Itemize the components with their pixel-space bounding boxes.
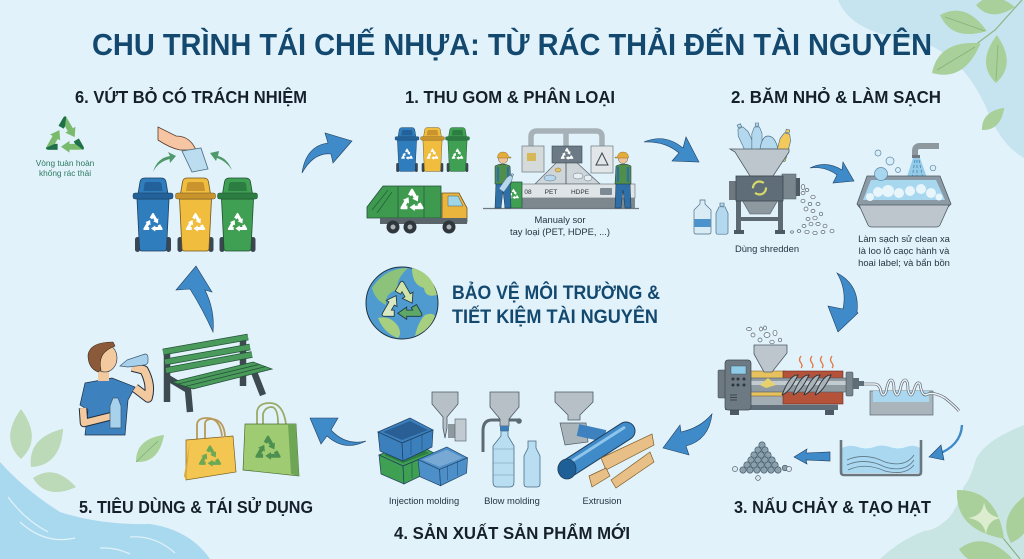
icon: bottle held	[499, 172, 515, 192]
icon: cooling bath	[864, 380, 959, 415]
icon: water tank	[841, 440, 921, 475]
icon: faucet and spray	[904, 146, 939, 186]
label: conveyor materials: 08	[524, 189, 532, 196]
arrow: step 5 to step 6	[176, 266, 213, 332]
text: blow caption: Blow molding	[484, 495, 540, 506]
icon: extruder machine	[718, 345, 864, 415]
icon: green bin	[218, 178, 258, 252]
text: loop caption: khống rác thải	[39, 168, 91, 178]
icon: bottles on floor	[694, 200, 728, 234]
text: washing caption: hoai label; và bẩn bồn	[858, 257, 950, 268]
text: loop caption	[36, 158, 95, 178]
illustration: washing tub	[857, 146, 951, 268]
decoration: left leaves	[10, 409, 78, 496]
icon: injection molding crates	[378, 392, 468, 486]
text: loop caption: Vòng tuàn hoàn	[36, 158, 95, 168]
text: washing caption: Làm sạch sử clean xa	[858, 233, 951, 244]
text: sorting caption: Manualy sor	[534, 214, 586, 225]
badge: closed loop	[36, 116, 95, 178]
icon: extrusion pipe and wood	[555, 392, 654, 488]
icon: recycled bench	[163, 336, 272, 412]
heading: step 4: 4. SẢN XUẤT SẢN PHẨM MỚI	[394, 522, 630, 543]
decoration: top right leaves	[926, 0, 1022, 135]
label: conveyor materials: PET	[545, 189, 557, 196]
text: sorting caption: tay loại (PET, HDPE, ...)	[510, 226, 610, 237]
arrow: green left	[153, 152, 176, 172]
decoration: bottom left water wave	[0, 462, 210, 559]
arrow: step 3 to step 4	[663, 414, 712, 455]
icon: plastic flakes falling	[746, 326, 782, 344]
text: shredder caption: Dùng shredden	[735, 243, 799, 254]
arrow: strand to water tank	[936, 425, 962, 455]
icon: heat waves	[800, 356, 833, 368]
text: message: TIẾT KIỆM TÀI NGUYÊN	[452, 304, 658, 328]
heading: step 5: 5. TIÊU DÙNG & TÁI SỬ DỤNG	[79, 496, 313, 517]
arrow: step 4 to step 5	[310, 418, 366, 445]
text: injection caption: Injection molding	[389, 495, 459, 506]
arrow: step 6 to step 1	[302, 133, 352, 173]
heading: step 6: 6. VỨT BỎ CÓ TRÁCH NHIỆM	[75, 86, 307, 107]
icon: blow molding bottles	[483, 392, 540, 487]
icon: yellow bin	[176, 178, 216, 252]
label: conveyor materials	[524, 189, 590, 196]
arrow: head	[929, 445, 944, 460]
illustration: step 1 collection	[367, 128, 639, 237]
text: sorting caption	[510, 214, 610, 237]
text: washing caption: là loo lỏ caọc hành và	[859, 245, 950, 256]
icon: yellow tote bag	[184, 418, 236, 480]
heading: step 3: 3. NẤU CHẢY & TẠO HẠT	[734, 496, 931, 517]
illustration: step 6 bins and hand	[133, 127, 258, 252]
decoration: bottom right leaves	[946, 480, 1024, 559]
icon: green tote bag	[243, 403, 299, 476]
text: message: BẢO VỆ MÔI TRƯỜNG &	[452, 280, 660, 304]
arrow: step 2 to step 3	[828, 273, 858, 332]
arrow: step 1 to step 2	[644, 137, 699, 162]
icon: plastic cup	[182, 148, 208, 172]
decoration: small leaf	[130, 429, 170, 468]
icon: three bins	[395, 128, 470, 172]
icon: garbage truck	[367, 186, 467, 234]
text: message	[452, 280, 660, 328]
illustration: step 5 consumption	[80, 336, 299, 480]
icon: globe	[366, 267, 438, 339]
icon: recycle	[41, 116, 87, 158]
illustration: shredder	[694, 122, 834, 254]
icon: pellet pile	[732, 442, 792, 480]
arrow: green right	[210, 151, 232, 170]
icon: plastic flakes	[790, 184, 834, 235]
heading: step 2: 2. BĂM NHỎ & LÀM SẠCH	[731, 86, 941, 107]
center: globe and message	[366, 267, 660, 339]
arrow: shredder to washing tub	[810, 162, 854, 183]
arrow: tank to pellets	[794, 449, 830, 464]
decoration: bottom right blob	[880, 425, 1024, 559]
heading: step 1: 1. THU GOM & PHÂN LOẠI	[405, 86, 615, 107]
title: CHU TRÌNH TÁI CHẾ NHỰA: TỪ RÁC THẢI ĐẾN TÀI NGUYÊN	[92, 26, 932, 62]
illustration: step 4 manufacturing	[378, 392, 654, 506]
text: extrusion caption: Extrusion	[582, 495, 622, 506]
icon: left worker	[495, 152, 511, 208]
icon: bottles on top	[734, 122, 793, 162]
decoration: top right blob	[838, 0, 1024, 158]
illustration: step 3 extruder	[718, 326, 962, 480]
icon: person drinking	[80, 342, 149, 435]
illustration: sorting machine	[483, 131, 639, 208]
label: conveyor materials: HDPE	[571, 189, 590, 196]
text: washing caption	[858, 233, 951, 268]
icon: shredder machine	[729, 149, 800, 234]
icon: bubbles	[874, 150, 936, 180]
icon: tub	[857, 176, 951, 227]
icon: blue bin	[133, 178, 173, 252]
icon: hand	[158, 127, 196, 150]
icon: right worker	[615, 152, 631, 208]
